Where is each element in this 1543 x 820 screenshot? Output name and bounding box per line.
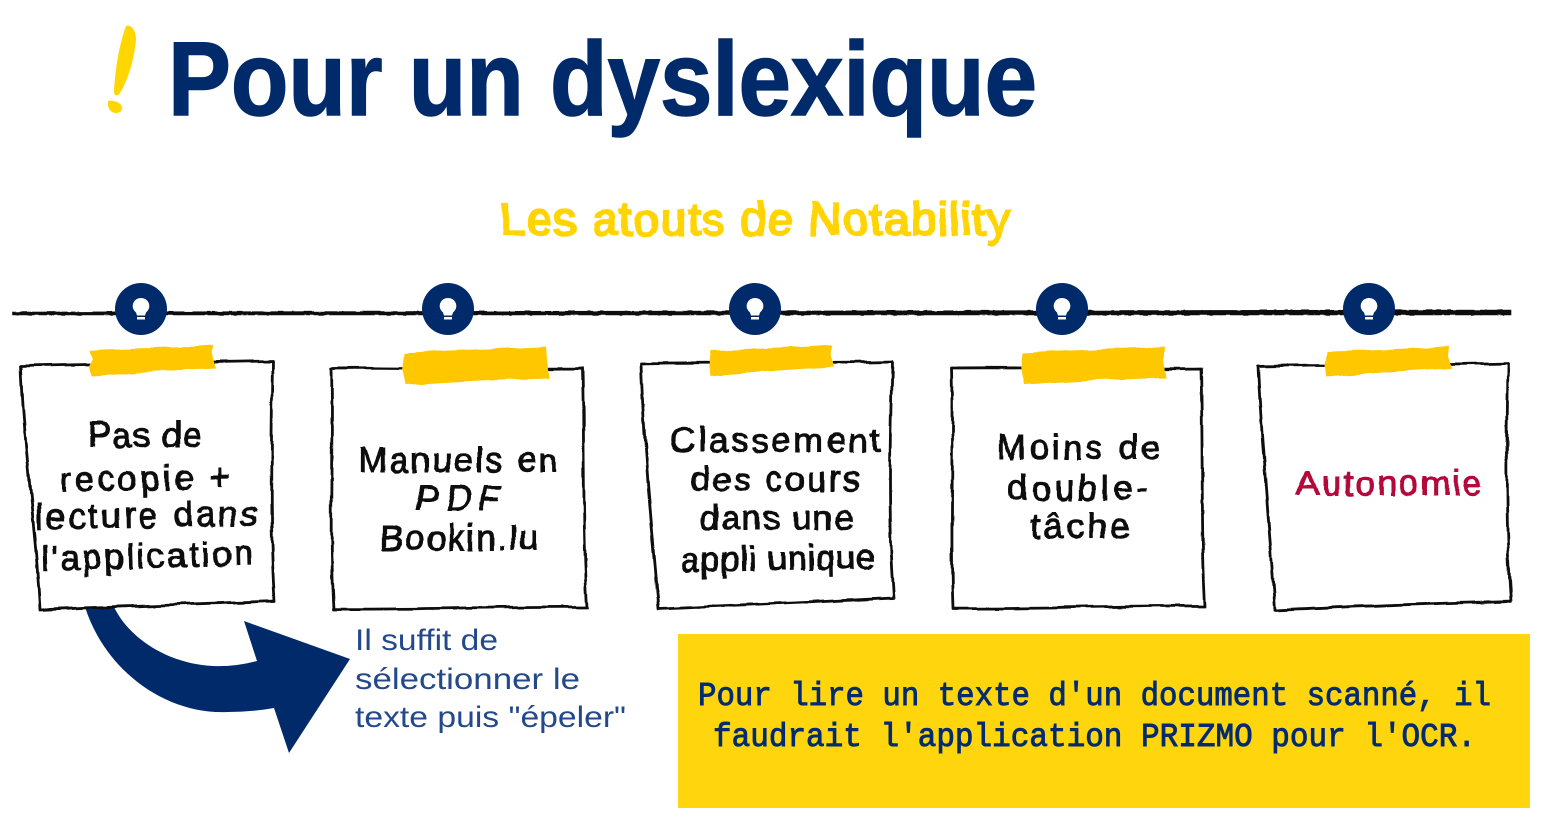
card 3: one app: dans une — [700, 499, 853, 538]
timeline marker 2 — [422, 283, 474, 335]
timeline marker 1 — [115, 283, 167, 335]
card 3: one app: des cours — [690, 460, 860, 499]
tip text: Il suffit de — [355, 624, 498, 657]
tip text: texte puis "épeler" — [355, 701, 626, 734]
arrow to tip — [85, 607, 350, 753]
card 3: one app: Classement — [670, 421, 880, 460]
subtitle: Les atouts de Notability — [500, 193, 1010, 245]
card 4: less dual-tasking: double- — [1008, 469, 1148, 508]
callout: OCR note — [678, 634, 1530, 808]
card 1: no copying — [21, 345, 275, 610]
icon: yellow exclamation mark — [108, 26, 136, 113]
title: Pour un dyslexique — [168, 21, 1037, 138]
card 1: no copying: lecture dans — [35, 494, 258, 537]
card 1: no copying: Pas de — [88, 416, 202, 455]
card 4: less dual-tasking: Moins de — [997, 428, 1161, 467]
timeline marker 5 — [1343, 283, 1395, 335]
card 4: less dual-tasking: tâche — [1031, 507, 1130, 546]
card 3: one app: appli unique — [680, 537, 875, 580]
tip text: sélectionner le — [355, 663, 580, 696]
card 5: autonomy: Autonomie — [1296, 464, 1482, 503]
card 2: PDF textbooks — [332, 346, 587, 609]
timeline marker 4 — [1036, 283, 1088, 335]
card 3: one app — [641, 345, 894, 609]
card 5: autonomy — [1258, 346, 1511, 610]
tip text — [355, 624, 626, 734]
card 2: PDF textbooks: Bookin.lu — [380, 519, 538, 558]
card 4: less dual-tasking — [952, 346, 1205, 608]
card 2: PDF textbooks: Manuels en — [358, 441, 558, 480]
callout: OCR note: Pour lire un texte d'un document scanné, il — [698, 678, 1491, 715]
card 1: no copying: l'application — [41, 534, 254, 579]
card 2: PDF textbooks: PDF — [415, 479, 503, 518]
card 1: no copying: recopie + — [60, 458, 230, 499]
timeline marker 3 — [729, 283, 781, 335]
timeline line — [14, 311, 1510, 315]
callout: OCR note: faudrait l'application PRIZMO pour l'OCR. — [713, 719, 1476, 756]
